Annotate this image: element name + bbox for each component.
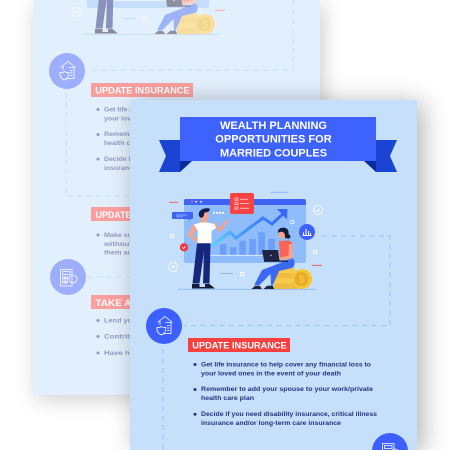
icon: insurance house [146, 308, 182, 344]
title text: MARRIED COUPLES [220, 147, 327, 159]
title text: OPPORTUNITIES FOR [215, 134, 332, 146]
text block: insurance bullets: insurance and/or long-term care insurance [201, 420, 341, 427]
section heading: second step [91, 207, 151, 221]
text block: insurance bullets: Get life insurance to help cover any financial loss to [201, 362, 371, 368]
checklist card [230, 193, 254, 214]
decorations [169, 192, 322, 276]
chart window [184, 199, 306, 263]
connector: dashed path from illustration to first step [87, 0, 293, 70]
ribbon body [180, 117, 376, 161]
title text [215, 120, 332, 159]
connector: dashed path from illustration to first step [184, 236, 390, 326]
icon: calculator step [372, 433, 408, 450]
text block: second step bullets: them au [104, 250, 132, 256]
text block: insurance bullets: Remember to add your spouse to your work/private [201, 386, 373, 393]
text block: insurance bullets: your loved ones in the event of your death [201, 370, 341, 378]
section heading: update insurance: UPDATE INSURANCE [95, 86, 190, 96]
text block: insurance bullets: Remember to add your spouse to your work/private [104, 131, 276, 138]
text block: insurance bullets: health care plan [104, 140, 157, 147]
text block: insurance bullets: Decide if you need disability insurance, critical illness [104, 156, 280, 163]
back card tint [33, 0, 320, 395]
panel: front card background [130, 100, 417, 450]
section heading: third step [91, 295, 151, 309]
text block: insurance bullets: Get life insurance to help cover any financial loss to [104, 106, 274, 114]
text block: insurance bullets [194, 362, 377, 427]
growth arrow [210, 209, 288, 247]
title text: WEALTH PLANNING [220, 120, 327, 132]
section heading: update insurance: UPDATE INSURANCE [192, 340, 287, 352]
text block: insurance bullets: your loved ones in the event of your death [104, 116, 244, 122]
text block: insurance bullets: health care plan [201, 395, 254, 402]
icon: calculator step [50, 259, 86, 295]
text block: insurance bullets: Decide if you need disability insurance, critical illness [201, 411, 377, 418]
text block: second step bullets [96, 232, 133, 256]
connector: dashed line from calculator step [87, 276, 130, 278]
text block: third step bullets: Lend yo [104, 318, 132, 324]
text block: second step bullets: Make su [104, 232, 132, 239]
illustration: faded couple with chart [72, 0, 226, 34]
text block: third step bullets: Have hi [104, 350, 132, 357]
panel: back card background [33, 0, 320, 395]
text block: third step bullets [96, 318, 132, 357]
connector: dashed line below first step [162, 349, 164, 450]
ground line [178, 288, 316, 290]
title ribbon [159, 117, 397, 172]
woman figure [252, 228, 295, 289]
man figure [188, 208, 229, 288]
gold coins [270, 268, 312, 289]
text block: second step bullets: without [103, 241, 133, 248]
connector: dashed path from first step downward [66, 93, 320, 196]
section heading: third step: TAKE A [96, 298, 132, 309]
text block: insurance bullets: insurance and/or long-term care insurance [104, 165, 244, 172]
ribbon tails [159, 140, 397, 172]
section heading: second step: UPDATE [96, 210, 132, 221]
icon: insurance house [49, 53, 85, 89]
illustration: couple with growth chart [169, 192, 322, 289]
text block: insurance bullets [96, 106, 280, 172]
gold coins: $ [298, 274, 305, 286]
text block: third step bullets: Contrib [104, 334, 132, 340]
